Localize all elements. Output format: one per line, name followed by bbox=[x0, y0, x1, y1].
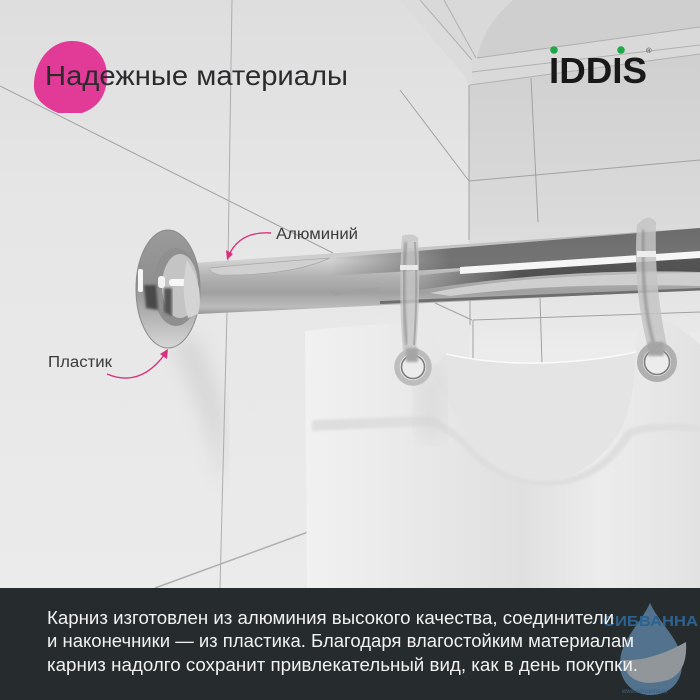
body text: и наконечники — из пластика. Благодаря влагостойким материалам bbox=[47, 631, 634, 651]
label: plastic bbox=[48, 349, 168, 378]
curtain bbox=[305, 320, 700, 588]
curtain ring left bbox=[397, 234, 429, 383]
label: aluminium: Алюминий bbox=[276, 226, 358, 243]
watermark: drop with bathtub bbox=[603, 603, 698, 695]
curtain ring right bbox=[636, 218, 674, 379]
label: plastic: Пластик bbox=[48, 354, 112, 371]
wall flange bbox=[136, 230, 200, 348]
watermark: drop with bathtub: СИБВАННА bbox=[603, 613, 698, 630]
body text: карниз надолго сохранит привлекательный вид, как в день покупки. bbox=[47, 655, 638, 675]
bottom text panel bbox=[0, 588, 700, 700]
IDDIS logo: IDDIS bbox=[549, 50, 647, 91]
IDDIS logo: ® bbox=[646, 46, 652, 55]
watermark: drop with bathtub: www.sibvanna.ru bbox=[621, 689, 667, 695]
title: Надежные материалы bbox=[45, 60, 348, 91]
body text: Карниз изготовлен из алюминия высокого качества, соединители bbox=[47, 608, 614, 628]
curtain rod bbox=[193, 228, 700, 314]
pink title blob bbox=[34, 41, 107, 113]
label: aluminium bbox=[226, 226, 358, 260]
